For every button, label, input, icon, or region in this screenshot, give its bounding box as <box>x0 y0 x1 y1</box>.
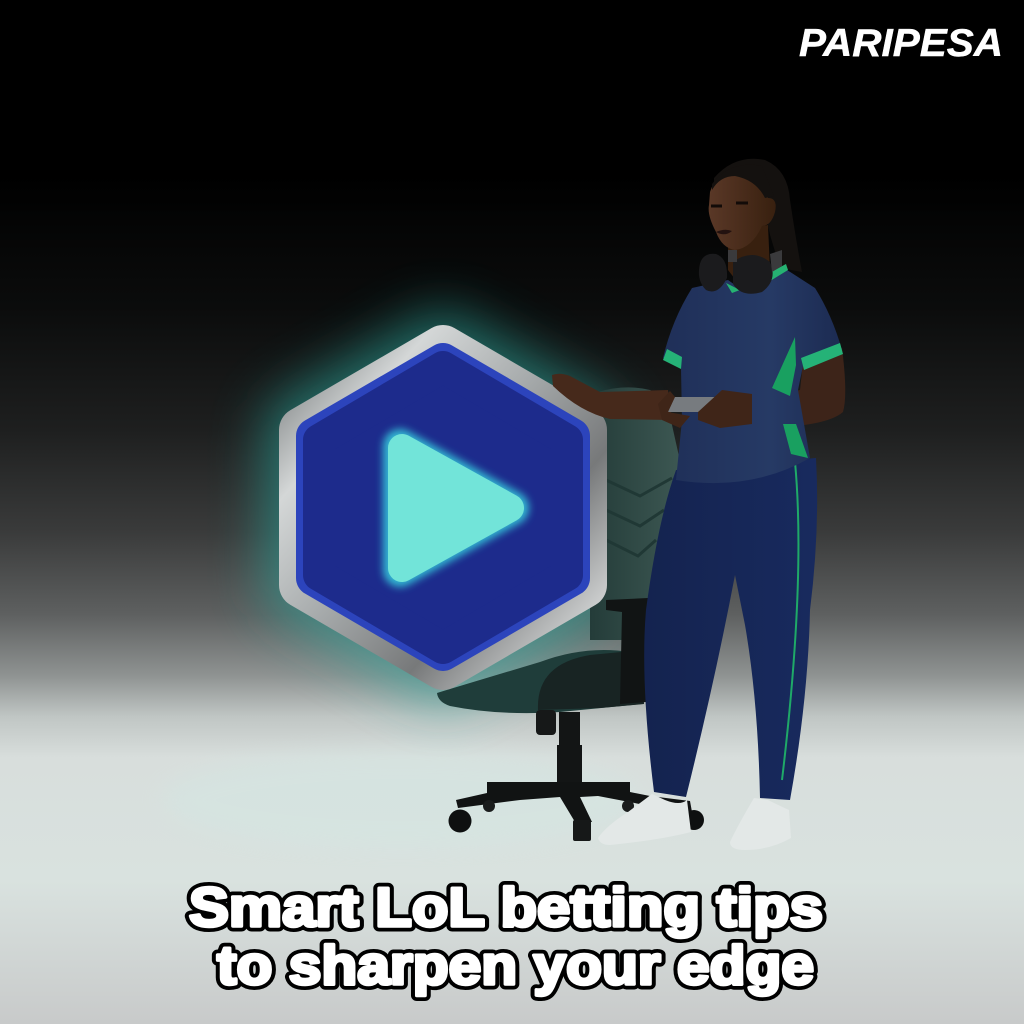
hairline <box>712 165 774 198</box>
neck <box>728 225 770 292</box>
chair back <box>590 387 682 640</box>
chair lever <box>536 710 556 735</box>
logo wordmark: PARIPESA <box>799 22 1003 65</box>
chair armrest <box>606 598 648 704</box>
hands <box>658 390 752 428</box>
hexagon glow <box>297 343 589 672</box>
left arm <box>552 374 672 420</box>
hexagon blue rim <box>314 361 572 653</box>
title outline <box>189 876 823 996</box>
title: Smart LoL betting tips to sharpen your edge <box>189 876 823 996</box>
left shoe <box>598 794 691 845</box>
hair braids <box>714 159 802 272</box>
face <box>709 170 776 250</box>
pants stripe <box>782 462 798 780</box>
title fill <box>189 876 823 996</box>
gaming chair <box>437 387 704 841</box>
right arm <box>730 348 845 428</box>
pants <box>644 458 817 800</box>
game controller <box>664 397 720 412</box>
eyes and lips <box>711 203 748 206</box>
play icon glow <box>400 446 512 570</box>
hexagon blue face <box>319 367 567 648</box>
chair seat <box>437 650 648 713</box>
right shoe <box>730 798 791 850</box>
chair base <box>456 782 692 822</box>
title fill: to sharpen your edge <box>217 934 814 996</box>
shirt green side panel <box>772 337 808 458</box>
chair casters <box>448 810 472 832</box>
title fill: Smart LoL betting tips <box>189 876 823 938</box>
headphones <box>699 254 773 294</box>
shirt collar <box>726 264 788 293</box>
title outline: Smart LoL betting tips <box>189 876 823 938</box>
sleeve cuffs <box>663 343 843 370</box>
floor glow <box>160 750 640 850</box>
title outline: to sharpen your edge <box>217 934 814 996</box>
chair column <box>557 712 582 785</box>
shirt <box>663 268 842 483</box>
hexagon play badge <box>302 348 584 667</box>
person with controller <box>552 159 845 850</box>
hexagon steel frame <box>302 348 584 667</box>
play icon <box>402 448 510 568</box>
